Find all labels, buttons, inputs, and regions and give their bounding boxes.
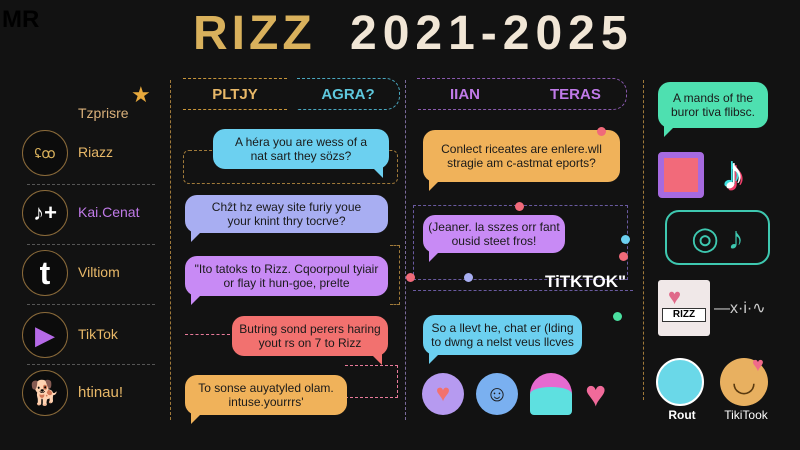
callout: right: [658, 82, 768, 128]
text: AGRA?: [321, 86, 375, 103]
creator 2: Kai.Cenat: [78, 204, 139, 220]
header tabs col2: IIAN TERAS: [450, 86, 601, 103]
emoji row: ♥: [436, 380, 450, 407]
bubbles col1: [213, 129, 389, 169]
avatar: TikiTook: ♥: [752, 354, 764, 376]
creator 5: 🐕: [30, 380, 60, 406]
icon: rizz sticker: [658, 280, 710, 336]
icon: outlined tiktok pair: [665, 210, 770, 265]
title: [193, 7, 634, 60]
icon: rizz sticker: ♥: [668, 284, 681, 309]
creator 3: [22, 250, 120, 296]
text: Butring sond perers haring: [239, 322, 381, 336]
header tabs col2: [417, 78, 627, 110]
left heading: Tzprisre: [78, 105, 129, 121]
text: (Jeaner. la sszes orr fant: [428, 220, 560, 234]
creator 1: [22, 130, 113, 176]
text: To sonse auyatyled olam.: [198, 381, 334, 395]
bubbles col1: nat sart they sözs?: [251, 149, 351, 163]
text: ousid steet fros!: [452, 234, 536, 248]
emoji row: ☺: [486, 381, 508, 406]
bubbles col1: A héra you are wess of a: [235, 135, 367, 149]
icon: tiktok: ♪: [722, 147, 745, 199]
emoji row: [422, 373, 606, 415]
text: "Ito tatoks to Rizz. Cqoorpoul tyiair: [195, 262, 378, 276]
creator 3: Viltiom: [78, 264, 120, 280]
creator 3: t: [40, 254, 50, 290]
icon: star: ★: [131, 82, 151, 107]
text: to dwng a nelst veus llcves: [431, 335, 574, 349]
text: Chẑt hz eway site furiy youe: [212, 200, 361, 214]
creator 2: [22, 190, 140, 236]
header tabs col1: [183, 78, 287, 110]
logo MR: MR: [2, 6, 39, 33]
bubbles col2: [423, 130, 620, 182]
TikTok logo text: TiTKTOK": [545, 272, 626, 291]
creator 5: [22, 370, 123, 416]
text: 2021-2025: [350, 7, 634, 60]
connector lines: [183, 150, 398, 184]
bubbles col2: stragie am c-astmat eports?: [447, 156, 596, 170]
squiggle: —x·i·∿: [714, 300, 766, 317]
avatar: Rout: Rout: [668, 408, 696, 422]
creator 5: htinau!: [78, 384, 123, 401]
creator 1: ʢꝏ: [34, 144, 56, 160]
creator 2: ♪+: [33, 200, 57, 225]
icon: rizz sticker: RIZZ: [673, 309, 695, 320]
creator 4: TikTok: [78, 326, 118, 342]
avatar: Rout: [656, 358, 704, 422]
title: RIZZ: [193, 7, 316, 60]
icon: face sticker: [658, 152, 704, 198]
creator 4: [22, 312, 118, 358]
bubbles col2: Conlect riceates are enlere.wll: [441, 142, 602, 156]
creator 1: Riazz: [78, 144, 113, 160]
creator 4: ▶: [35, 320, 55, 350]
avatar: TikiTook: TikiTook: [724, 408, 768, 422]
text: or flay it hun-goe, prelte: [223, 276, 350, 290]
callout: right: A mands of the: [673, 91, 753, 105]
text: yout rs on 7 to Rizz: [259, 336, 361, 350]
avatar: TikiTook: ◡: [732, 366, 756, 397]
header tabs col1: PLTJY: [212, 86, 258, 103]
emoji row: ♥: [585, 373, 606, 414]
panel: left creators list: [22, 130, 140, 416]
dots: [597, 127, 606, 136]
icon: outlined tiktok pair: ◎ ♪: [691, 220, 744, 256]
avatar: TikiTook: [720, 354, 768, 422]
text: intuse.yourrrs': [228, 395, 303, 409]
text: your knint thry tocrve?: [227, 214, 346, 228]
callout: right: buror tiva flibsc.: [671, 105, 755, 119]
text: So a llevt he, chat er (lding: [431, 321, 574, 335]
